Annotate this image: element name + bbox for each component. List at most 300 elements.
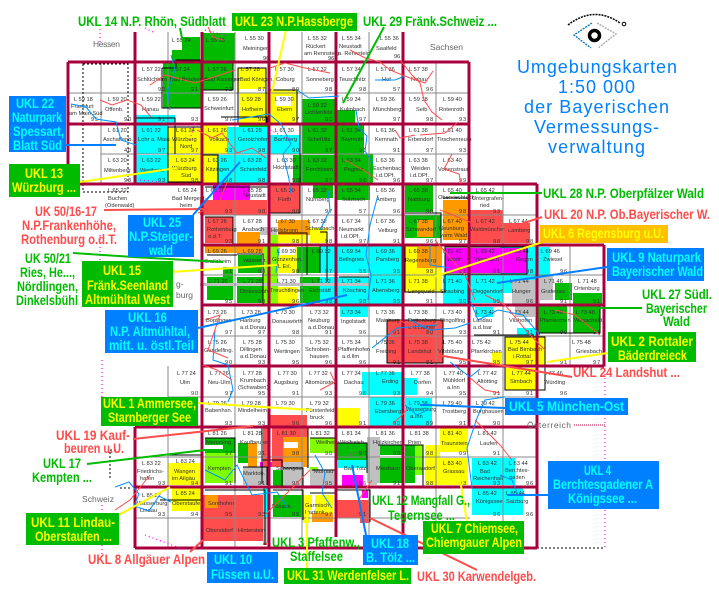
sheet labels: Würzburg [172, 166, 197, 172]
sheet labels: Wörth [447, 257, 462, 263]
sheet labels: Kaufbeuren [240, 440, 269, 446]
sheet labels: L 61 20 [108, 128, 127, 134]
sheet labels: L 61 24 [176, 128, 195, 134]
sheet labels: L 65 38 [409, 188, 428, 194]
sheet labels: Ingolstadt [341, 319, 366, 325]
sheet labels: i.d.OPf. [341, 234, 360, 240]
sheet labels: Altomünster [305, 380, 335, 386]
sheet labels: L 67 38 [409, 219, 428, 225]
sheet labels: Zwiesel [543, 257, 562, 263]
label: UKL 1: Starnberger See [108, 410, 191, 425]
sheet labels: Erbendorf [408, 137, 433, 143]
label: UK 50/21: Nördlingen, [17, 279, 78, 294]
sheet labels: L 71 32 [312, 279, 331, 285]
sheet labels: Dachau [344, 380, 364, 386]
sheet labels: Grassau [443, 469, 464, 475]
sheet labels: 939491919595969198939396 [158, 481, 533, 487]
sheet labels: L 65 28 [243, 188, 262, 194]
sheet labels: Würzburg [172, 137, 197, 143]
label: UKL 17: Kempten ... [32, 470, 92, 485]
sheet labels: Gundelfing. [204, 348, 234, 354]
sheet labels: Hof [382, 77, 391, 83]
label: UKL 2: Bäderdreieck [618, 348, 687, 363]
label: UKL 29: UKL 29 Fränk.Schweiz ... [363, 14, 497, 29]
title: der Bayerischen [524, 97, 669, 117]
sheet labels: Bamberg [274, 137, 297, 143]
sheet labels: L 81 38 [410, 431, 429, 437]
sheet labels: L 59 30 [275, 97, 294, 103]
label: UKL 10: Füssen u.U. [211, 567, 274, 582]
sheet labels: L 67 44 [509, 219, 528, 225]
sheet labels: L 63 30 [277, 158, 296, 164]
sheet labels: Sonthofen [208, 501, 234, 507]
sheet labels: L 85 22 [142, 493, 161, 499]
sheet labels: L 67 32 [308, 219, 327, 225]
sheet labels: L 55 34 [342, 36, 361, 42]
map of sheet grid [68, 25, 605, 555]
sheet labels: Dinkelsbühl [240, 289, 269, 295]
sheet labels: L 77 40 [444, 371, 463, 377]
sheet labels: Saalfeld [376, 46, 397, 52]
sheet labels: L 67 34 [342, 219, 361, 225]
sheet labels: Oberaudorf [406, 466, 435, 472]
sheet labels: L 81 42 [478, 431, 497, 437]
sheet labels: L 83 44 [509, 461, 528, 467]
half-sheet grid lines [68, 32, 604, 548]
sheet labels: 939396969190899190 [225, 421, 500, 427]
sheet labels: L 67 26 [208, 219, 227, 225]
sheet labels: a. Rennsteig [338, 51, 370, 57]
label: UKL 19 [56, 428, 130, 456]
label: UKL 22: Spessart, [13, 124, 64, 139]
sheet labels: L 65 32 [308, 188, 327, 194]
sheet labels: L 61 38 [409, 128, 428, 134]
sheet labels: Bayreuth [341, 137, 364, 143]
sheet labels: L 61 34 [342, 128, 361, 134]
label: UKL 27: Wald [663, 314, 690, 329]
label: UKL 23: UKL 23 N.P.Hassberge [235, 14, 353, 29]
title: 1:50 000 [558, 77, 635, 97]
sheet labels: 909795919396939495919196 [191, 391, 567, 397]
sheet labels: Regensburg [405, 258, 436, 264]
label: UK 50/16-17: Rothenburg o.d.T. [21, 232, 117, 247]
sheet labels: Bad Kissingen [205, 77, 241, 83]
sheet labels: i.d.OPf. [410, 173, 429, 179]
sheet labels: Freising [376, 349, 396, 355]
roads [100, 27, 600, 515]
label: UK 50/16-17: N.P.Frankenhöhe, [22, 218, 116, 233]
sheet labels: L 57 28 [241, 67, 260, 73]
sheet labels: L 79 30 [276, 401, 295, 407]
sheet labels: 959896989895919095969191 [225, 299, 600, 305]
label: UKL 11: Oberstaufen ... [35, 529, 112, 544]
sheet labels: L 69 32 [312, 249, 331, 255]
sheet labels: 909192878998985796 [158, 87, 433, 93]
sheet labels [69, 36, 602, 534]
label: UKL 22: Naturpark [12, 110, 62, 125]
sheet labels: 9393989898909796969799 [124, 178, 466, 184]
sheet labels: L 57 22 [142, 67, 161, 73]
sheet labels: L 69 28 [243, 249, 262, 255]
sheet labels: L 67 36 [376, 219, 395, 225]
sheet labels: Miltenberg [104, 168, 131, 174]
sheet labels: bruck [310, 415, 324, 421]
sheet labels: Wertingen [274, 349, 300, 355]
sheet labels: Nürnberg [306, 197, 330, 203]
sheet labels: L 77 44 [512, 371, 531, 377]
sheet labels: Vilshofen [509, 318, 532, 324]
label: UKL 16: UKL 16 [128, 310, 167, 325]
sheet labels: L 61 30 [275, 128, 294, 134]
Österreich border marker [574, 424, 605, 426]
label: UKL 24: UKL 24 Landshut ... [573, 365, 680, 380]
sheet labels: Forchheim [306, 167, 333, 173]
sheet labels: L 77 26 [210, 371, 229, 377]
sheet labels: Deggendorf [473, 289, 503, 295]
sheet labels: L 71 36 [376, 279, 395, 285]
sheet labels: Grafenau [541, 289, 565, 295]
sheet labels: Bopfingen [206, 318, 232, 324]
sheet labels: am Rennsteig [304, 51, 339, 57]
sheet labels: Neustadt [339, 44, 362, 50]
sheet labels: L 69 36 [376, 249, 395, 255]
sheet labels: Ebern [277, 107, 292, 113]
sheet labels: L 63 28 [243, 158, 262, 164]
sheet labels: Schwabach [305, 226, 334, 232]
sheet labels: L 77 36 [376, 371, 395, 377]
sheet labels: Heilsbronn [271, 228, 298, 234]
sheet labels: L 73 26 [208, 310, 227, 316]
sheet labels: L 55 26 [206, 38, 225, 44]
sheet labels: i.d.OPf. [376, 173, 395, 179]
sheet labels: L Erl. [278, 264, 291, 270]
label: UK 50/16-17: UK 50/16-17 [35, 204, 97, 219]
sheet labels: Burghausen [473, 409, 504, 415]
sheet labels: Nord [180, 144, 192, 150]
sheet labels: L 73 44 [510, 310, 529, 316]
sheet labels: L 69 42 [476, 249, 495, 255]
sheet labels: L 69 40 [443, 249, 462, 255]
label: UKL 17: UKL 17 [43, 456, 81, 471]
sheet labels: L 79 28 [242, 401, 261, 407]
sheet labels: Sonneberg [306, 77, 334, 83]
sheet labels: L 83 42 [478, 461, 497, 467]
sheet labels: (Schwaben) [238, 385, 268, 391]
label: UKL 2 [608, 332, 696, 363]
neighbouring countries [82, 39, 571, 504]
sheet labels: Abensberg [372, 288, 400, 294]
sheet labels: Parsberg [376, 257, 399, 263]
sheet labels: Traunstein [441, 441, 468, 447]
sheet labels: L 75 42 [472, 340, 491, 346]
sheet labels: L 61 22 [142, 128, 161, 134]
sheet labels: Dingolfing [440, 318, 465, 324]
label: UKL 1 [101, 396, 198, 426]
sheet labels: L 75 26 [208, 340, 227, 346]
sheet labels: Kulmbach [340, 107, 365, 113]
sheet labels: Dillingen [240, 347, 262, 353]
sheet labels: Holzkirchen [373, 440, 403, 446]
label: UKL 25 [128, 215, 194, 258]
sheet labels: im Allgäu [172, 476, 195, 482]
sheet labels: L 63 26 [208, 158, 227, 164]
sheet labels: (Odenwald) [105, 203, 135, 209]
sheet labels: L 73 36 [376, 310, 395, 316]
label: UKL 18: B. Tölz ... [366, 550, 415, 565]
sheet labels: Oberviechtach [438, 195, 475, 201]
sheet labels: L 75 30 [276, 340, 295, 346]
sheet labels: Ansbach [242, 227, 264, 233]
sheet labels: L 63 22 [142, 158, 161, 164]
label: UKL 2: UKL 2 Rottaler [611, 334, 694, 349]
sheet labels: Wasserburg [137, 501, 167, 507]
sheet labels: Schwandorf [406, 227, 436, 233]
sheet labels: Amberg [376, 197, 396, 203]
sheet labels: Babenhsn. [205, 408, 233, 414]
sheet labels: 959091939796979097979893 [91, 117, 466, 123]
sheet labels: L 63 20 [108, 158, 127, 164]
sheet labels: L 65 42 [476, 188, 495, 194]
sheet labels: L 81 30 [277, 431, 296, 437]
sheet labels: Mindelheim [238, 408, 267, 414]
sheet labels: L 69 38 [409, 249, 428, 255]
sheet labels: Hofheim [242, 107, 263, 113]
sheet labels: ried [480, 203, 489, 209]
sheet labels: L 79 38 [409, 401, 428, 407]
sheet labels: hausen [310, 354, 329, 360]
sheet labels: L 61 36 [376, 128, 395, 134]
sheet labels: L 59 32 [308, 103, 327, 109]
label: UKL 25: UKL 25 [143, 215, 181, 230]
label: UKL 15 [82, 261, 173, 307]
thick sheet frame [68, 32, 604, 549]
sheet labels: L 73 34 [342, 310, 361, 316]
label: UKL 9 [607, 248, 704, 281]
sheet labels: L 81 28 [243, 431, 262, 437]
sheet labels: L 77 24 [177, 371, 196, 377]
sheet labels: Rothenburg [207, 227, 237, 233]
sheet labels: L 73 30 [276, 310, 295, 316]
label: UKL 13 [9, 164, 80, 197]
sheet labels: 979798919691809391919091 [225, 330, 600, 336]
sheet labels: L 69 30 [277, 249, 296, 255]
sheet labels: Frankfurt [71, 104, 94, 110]
label: UKL 16: mitt. u. östl.Teil [109, 338, 194, 353]
sheet labels: L 75 36 [376, 340, 395, 346]
sheet labels: Pfarrkirchen [471, 349, 502, 355]
sheet labels: Prien [408, 440, 421, 446]
sheet labels: Süd [181, 173, 191, 179]
sheet labels: L 71 40 [443, 279, 462, 285]
sheet labels: Rückert [306, 44, 326, 50]
sheet labels: Beilngries [339, 257, 364, 263]
label: UKL 4: Königssee ... [568, 491, 637, 506]
sheet labels: Ebersberg [375, 409, 401, 415]
sheet labels: L 59 36 [376, 97, 395, 103]
sheet labels: L 69 34 [342, 249, 361, 255]
label: UKL 10 [207, 552, 278, 583]
sheet labels: Fürstenfeld- [306, 408, 336, 414]
sheet labels: L 81 34 [342, 431, 361, 437]
sheet labels: Dorfen [414, 380, 431, 386]
sheet labels: Würding [544, 380, 565, 386]
sheet labels: Selb [416, 107, 427, 113]
sheet labels: L 77 38 [411, 371, 430, 377]
sheet labels: a.Inn [410, 414, 423, 420]
sheet labels: L 57 30 [275, 67, 294, 73]
sheet labels: L 79 32 [310, 401, 329, 407]
sheet labels: Schlüchtern [137, 77, 167, 83]
sheet labels: Griesbach [576, 349, 602, 355]
label: UKL 14: UKL 14 N.P. Rhön, Südblatt [78, 14, 226, 29]
sheet labels: Altötting [477, 379, 498, 385]
sheet labels: L 71 46 [544, 279, 563, 285]
sheet labels: L 55 24 [172, 38, 191, 44]
label: UK 50/21 [16, 251, 78, 308]
sheet labels: L 61 40 [443, 128, 462, 134]
sheet labels: Wangen [174, 469, 195, 475]
sheet labels: Aschaffenb. [103, 137, 133, 143]
neighbouring countries: g- [176, 279, 184, 289]
label: UK 50/16-17 [21, 204, 117, 247]
sheet labels: Oberstdorf [206, 528, 233, 534]
sheet labels: 909395969691819595979197 [225, 360, 600, 366]
sheet labels: Höchstadt [273, 165, 299, 171]
sheet labels: 96 [394, 54, 400, 60]
sheet labels: L 73 38 [409, 310, 428, 316]
sheet labels: L 77 32 [309, 371, 328, 377]
sheet labels: L 57 38 [409, 67, 428, 73]
sheet labels: L 85 44 [506, 491, 525, 497]
sheet labels: Wolfratsh. [340, 440, 366, 446]
sheet labels: Mainburg [376, 318, 400, 324]
label: UKL 7: Chiemgauer Alpen [426, 535, 522, 550]
sheet labels: L 71 42 [476, 279, 495, 285]
label: UKL 22 [9, 96, 66, 153]
sheet labels: Salzburg [506, 499, 528, 505]
label: UKL 15: Fränk.Seenland [87, 278, 168, 293]
sheet labels: L 85 42 [478, 491, 497, 497]
sheet labels: L 75 38 [409, 340, 428, 346]
sheet labels: L 71 28 [243, 279, 262, 285]
label: UKL 1: UKL 1 Ammersee, [103, 396, 196, 411]
sheet labels: L 59 26 [208, 97, 227, 103]
sheet labels: Tirschenreuth [437, 137, 472, 143]
sheet labels: Erding [382, 379, 398, 385]
sheet labels: Buchen [108, 196, 127, 202]
sheet labels: L 75 34 [342, 340, 361, 346]
sheet labels: L 67 40 [443, 219, 462, 225]
sheet labels: u.d.Laaber [408, 325, 435, 331]
sheet labels: L 79 36 [376, 401, 395, 407]
sheet labels: 96 [263, 56, 269, 62]
sheet labels: Kemnath [375, 137, 398, 143]
sheet labels: L 65 22 [108, 188, 127, 194]
sheet labels: Münchberg [373, 107, 401, 113]
label: UKL 11: UKL 11 Lindau- [31, 515, 115, 530]
sheet labels: Meiningen [243, 46, 269, 52]
sheet labels: Simbach [510, 379, 532, 385]
sheet labels: L 65 30 [276, 188, 295, 194]
sheet labels: L 81 40 [443, 431, 462, 437]
sheet labels: L 57 36 [376, 67, 395, 73]
label: UKL 25: N.P.Steiger- [129, 229, 193, 244]
sheet labels: Bad [480, 469, 490, 475]
sheet labels: Pegnitz [344, 167, 363, 173]
sheet labels: Partenk. [305, 510, 327, 516]
sheet labels: Sulzbach [342, 197, 365, 203]
sheet labels: L 73 46 [544, 310, 563, 316]
sheet labels: L 59 20 [108, 97, 127, 103]
label: UKL 13: UKL 13 [25, 166, 63, 181]
sheet labels: Hanau [142, 107, 159, 113]
sheet labels: Miesbach [376, 466, 400, 472]
leader lines [66, 27, 642, 572]
sheet labels: L 65 24 [178, 188, 197, 194]
sheet labels: am Main Süd [69, 111, 103, 117]
sheet labels: L 63 40 [443, 158, 462, 164]
sheet labels: L 61 32 [308, 128, 327, 134]
sheet labels: Kösching [343, 288, 366, 294]
sheet labels: Bad Königsh. [240, 77, 274, 83]
label: UKL 25: wald [148, 243, 173, 258]
label: UK 50/21: Dinkelsbühl [16, 293, 78, 308]
sheet labels: Waldmünchen [470, 227, 506, 233]
sheet labels: 9198989755959893919896 [225, 269, 567, 275]
sheet labels: Lohr a. Main [138, 137, 170, 143]
sheet labels: L 81 26 [208, 431, 227, 437]
label: UKL 18: UKL 18 [371, 536, 409, 551]
sheet labels: L 77 42 [478, 371, 497, 377]
sheet labels: Scheßlitz [307, 137, 331, 143]
sheet labels: Neustadt [243, 193, 266, 199]
sheet labels: Vohenstrauß [438, 167, 471, 173]
sheet labels: Vilsbiburg [438, 349, 463, 355]
label: UKL 15: UKL 15 [103, 263, 141, 278]
sheet labels: Langquaid [408, 289, 435, 295]
label: UKL 17 [32, 456, 92, 485]
sheet labels: Trostberg [442, 409, 466, 415]
sheet labels: gaden [509, 475, 525, 481]
sheet labels: Neunburg [439, 226, 464, 232]
label: UKL 4: Berchtesgadener A [553, 477, 653, 492]
sheet labels: Garmisch- [305, 503, 331, 509]
sheet labels: L 85 24 [176, 491, 195, 497]
neighbouring countries: Sachsen [430, 42, 463, 52]
rivers [71, 55, 540, 511]
sheet labels: L 69 46 [541, 249, 560, 255]
sheet labels: L 63 24 [176, 158, 195, 164]
sheet labels: L 59 34 [342, 97, 361, 103]
sheet labels: Bad Brückenau [170, 77, 209, 83]
sheet labels: Treuchtlingen [270, 288, 304, 294]
sheet labels: L 59 38 [409, 97, 428, 103]
sheet labels: Volkach [209, 137, 229, 143]
label: UKL 15: Altmühltal West [85, 292, 170, 307]
sheet labels: Hinterstein [238, 528, 265, 534]
sheet labels: Wegscheid [574, 318, 602, 324]
label: UKL 12 [372, 493, 470, 523]
sheet labels: Schweinfurt [204, 106, 234, 112]
coloured sheet areas [135, 33, 602, 545]
sheet labels: Berchtes- [505, 468, 529, 474]
sheet labels: L 57 26 [208, 67, 227, 73]
sheet labels: L 75 40 [443, 340, 462, 346]
sheet labels: L 81 36 [376, 431, 395, 437]
label: UKL 12: UKL 12 Mangfall G., [372, 493, 470, 508]
sheet labels: L 63 36 [376, 158, 395, 164]
sheet labels: L 61 26 [208, 128, 227, 134]
